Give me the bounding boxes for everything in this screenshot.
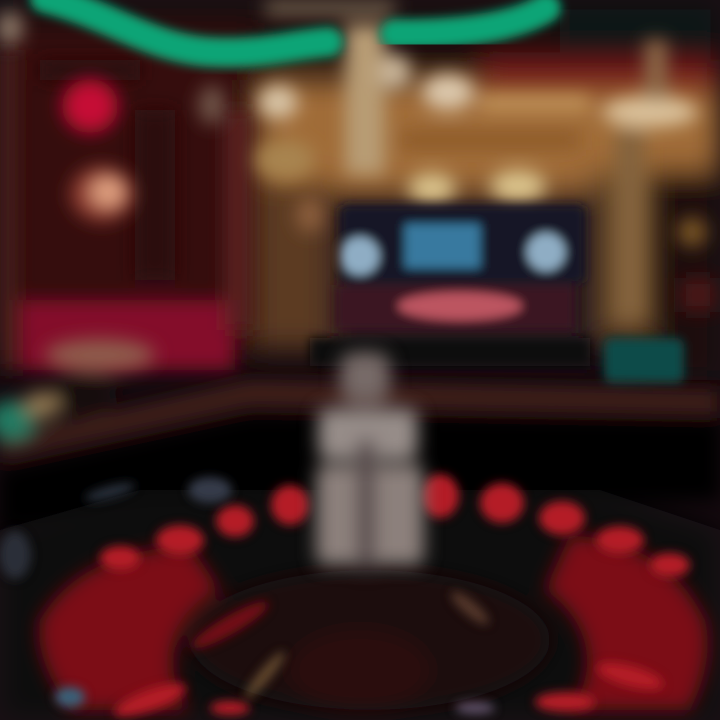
- icon: red lamp: [62, 79, 118, 133]
- counter and dark floor band: [0, 339, 720, 530]
- panel: teal chair: [604, 338, 684, 384]
- green neon band left: [45, 0, 328, 53]
- ceiling lights: [0, 0, 716, 320]
- chart: roulette wheel red ring: [39, 535, 708, 710]
- icon: warm lamp: [70, 166, 134, 222]
- back wall and ceiling: [0, 0, 720, 380]
- green neon band right: [395, 8, 546, 34]
- panel: roulette table: [0, 490, 720, 720]
- panel: central screens: [310, 205, 590, 366]
- panel: red wall at left: [0, 50, 250, 370]
- wheel details: [0, 477, 495, 714]
- wheel pockets: [100, 474, 690, 720]
- central figure: silver spindle: [316, 352, 424, 570]
